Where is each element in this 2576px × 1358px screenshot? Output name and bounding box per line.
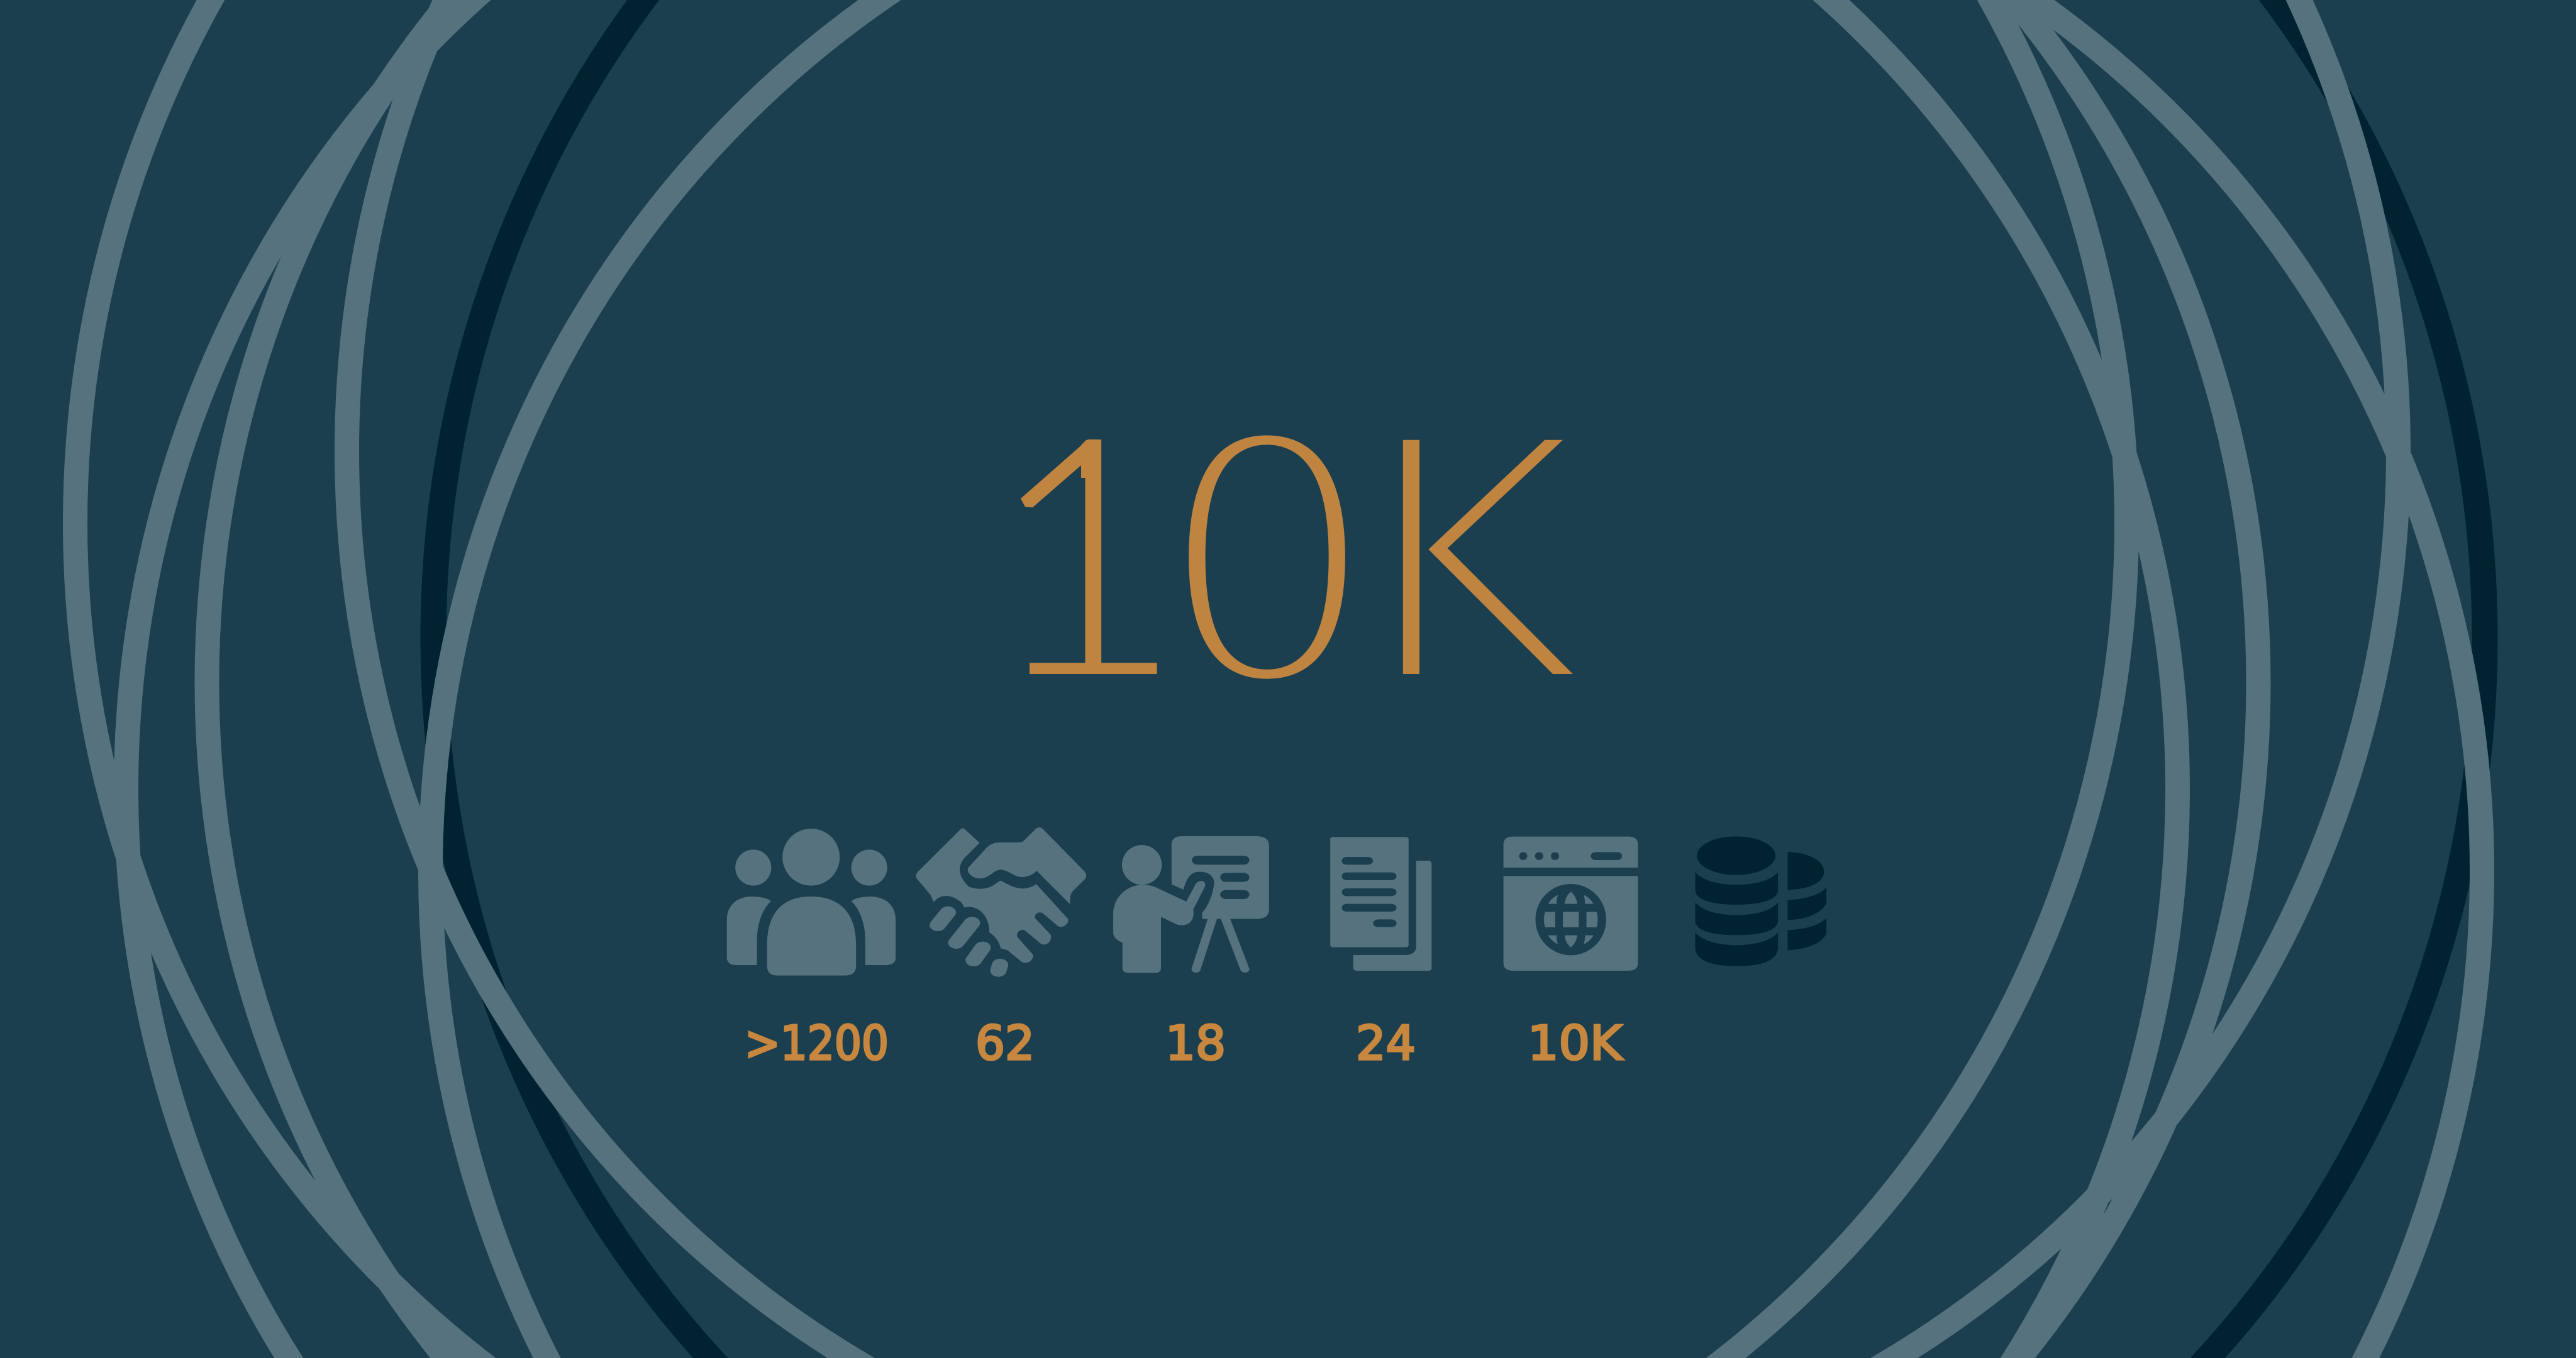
icon: documents xyxy=(1330,837,1431,971)
icon: browser window with globe xyxy=(1504,837,1638,971)
main figure: 10K: 10K xyxy=(978,363,1597,765)
stat label: 18: 18 xyxy=(1165,1015,1226,1071)
stat label: 10K: 10K xyxy=(1528,1015,1623,1071)
icon: handshake xyxy=(916,827,1086,971)
stat label: 24: 24 xyxy=(1356,1015,1416,1071)
icon: people xyxy=(727,829,896,976)
icon: coin stacks xyxy=(1696,836,1826,966)
stat label: 62: 62 xyxy=(975,1015,1035,1071)
icon: presenter at board xyxy=(1113,836,1269,973)
stat label: >1200: >1200 xyxy=(745,1015,889,1071)
